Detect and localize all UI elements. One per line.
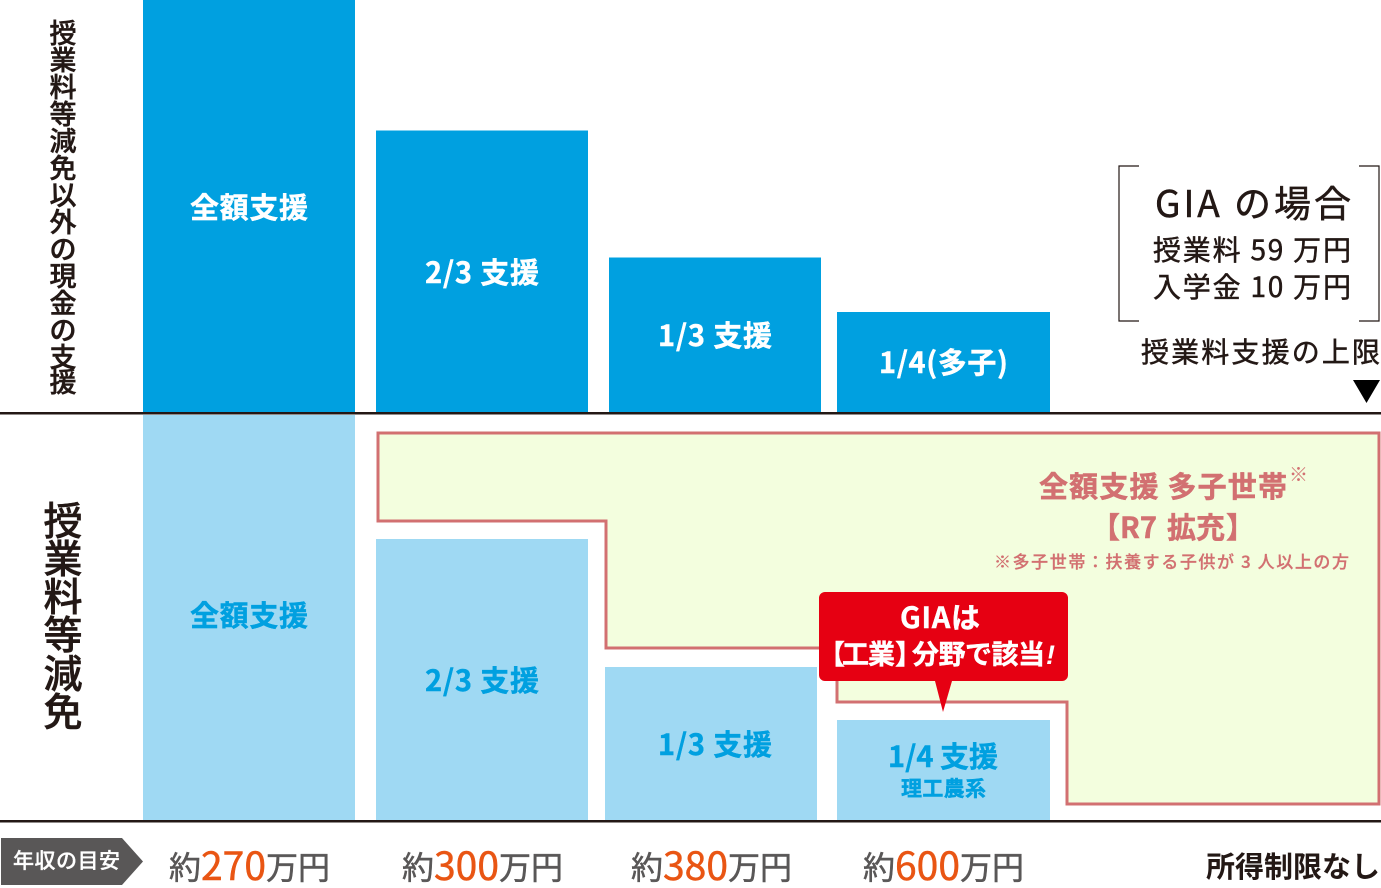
income: about 2.7 million yen: 万円: [266, 843, 330, 888]
vertical label: non-tuition cash support: 援: [50, 361, 76, 400]
panel: GIA tuition case: GIA の場合: [1155, 174, 1351, 228]
panel: GIA tuition case: 入学金 10 万円: [1153, 266, 1351, 306]
vertical label: non-tuition cash support: の: [50, 228, 76, 267]
heading: R7 expansion: R7: [1120, 505, 1157, 547]
bar: one-quarter science and engineering lower: 1/4 支援: [888, 734, 998, 776]
income: about 6 million yen: 約: [863, 843, 895, 888]
vertical label: non-tuition cash support: 現: [50, 255, 76, 294]
panel: GIA tuition case: [1119, 166, 1379, 321]
vertical label: non-tuition cash support: 授: [50, 12, 76, 51]
bar: two-thirds support upper: [376, 130, 588, 413]
income: about 2.7 million yen: 約: [169, 843, 201, 888]
panel: expanded full support area: [378, 433, 1379, 804]
bar: one-quarter science and engineering lower: 理工農系: [901, 773, 986, 803]
bar: full support upper: [143, 0, 355, 413]
bar: one-third support upper: 1/3 支援: [658, 313, 772, 355]
bar: full support lower: 全額支援: [190, 593, 308, 635]
bar: one-quarter science and engineering lower: [837, 720, 1050, 821]
vertical label: non-tuition cash support: 支: [50, 336, 76, 375]
label: tuition support upper limit: 授業料支援の上限: [1141, 331, 1380, 371]
callout: GIA applies to engineering: GIAは: [900, 595, 980, 637]
vertical label: non-tuition cash support: 免: [50, 147, 76, 186]
vertical label: non-tuition cash support: の: [50, 309, 76, 348]
income: about 3 million yen: 約: [402, 843, 434, 888]
heading: R7 expansion: 【: [1091, 505, 1120, 547]
vertical label: non-tuition cash support: 金: [50, 282, 76, 321]
bar: two-thirds support lower: [376, 539, 588, 821]
income: about 3.8 million yen: 万円: [728, 843, 792, 888]
vertical label: tuition reduction: 業: [43, 529, 83, 585]
income: no limit: 所得制限なし: [1206, 844, 1380, 886]
vertical label: tuition reduction: 授: [43, 491, 83, 547]
tag: annual income guide: [1, 838, 143, 885]
callout: GIA applies to engineering: [818, 592, 1068, 712]
heading: R7 expansion: 拡充: [1167, 505, 1225, 547]
axis line: upper: [0, 412, 1381, 414]
vertical label: tuition reduction: 料: [43, 567, 83, 623]
note mark: ※: [1289, 460, 1308, 487]
bar: one-quarter multi-child upper: 1/4(多子): [879, 340, 1008, 382]
vertical label: tuition reduction: 等: [43, 605, 83, 661]
income: about 6 million yen: 万円: [960, 843, 1024, 888]
callout: GIA applies to engineering: 工業: [842, 633, 895, 672]
callout: GIA applies to engineering: 】: [895, 633, 922, 672]
callout: GIA applies to engineering: 分野で該当: [912, 633, 1045, 672]
callout: GIA applies to engineering: !: [1046, 640, 1055, 670]
tag: annual income guide: 年収の目安: [13, 845, 120, 875]
income: about 3.8 million yen: 約: [631, 843, 663, 888]
heading: full support for multi-child households: 全額支援 多子世帯: [1039, 464, 1287, 506]
bar: two-thirds support upper: 2/3 支援: [425, 250, 539, 292]
bar: full support upper: 全額支援: [190, 185, 308, 227]
vertical label: non-tuition cash support: 等: [50, 93, 76, 132]
heading: R7 expansion: [1091, 505, 1255, 547]
bar: one-third support lower: 1/3 支援: [658, 722, 772, 764]
axis line: lower: [0, 820, 1381, 822]
icon: down triangle: [1353, 380, 1380, 403]
vertical label: tuition reduction: [43, 491, 83, 738]
vertical label: non-tuition cash support: 以: [50, 174, 76, 213]
vertical label: tuition reduction: 免: [43, 682, 83, 738]
bar: one-third support upper: [609, 258, 821, 413]
vertical label: non-tuition cash support: [50, 12, 76, 400]
heading: R7 expansion: 】: [1226, 505, 1255, 547]
vertical label: non-tuition cash support: 料: [50, 66, 76, 105]
callout: GIA applies to engineering: 【: [818, 633, 845, 672]
vertical label: non-tuition cash support: 業: [50, 39, 76, 78]
bar: one-quarter multi-child upper: [837, 312, 1050, 413]
bar: full support lower: [143, 415, 355, 821]
bar: one-third support lower: [605, 667, 817, 821]
panel: GIA tuition case: 授業料 59 万円: [1153, 229, 1351, 269]
vertical label: non-tuition cash support: 外: [50, 201, 76, 240]
vertical label: tuition reduction: 減: [43, 644, 83, 700]
vertical label: non-tuition cash support: 減: [50, 120, 76, 159]
income: about 3 million yen: 万円: [499, 843, 563, 888]
bar: two-thirds support lower: 2/3 支援: [425, 658, 539, 700]
footnote: ※多子世帯：扶養する子供が 3 人以上の方: [994, 548, 1349, 573]
